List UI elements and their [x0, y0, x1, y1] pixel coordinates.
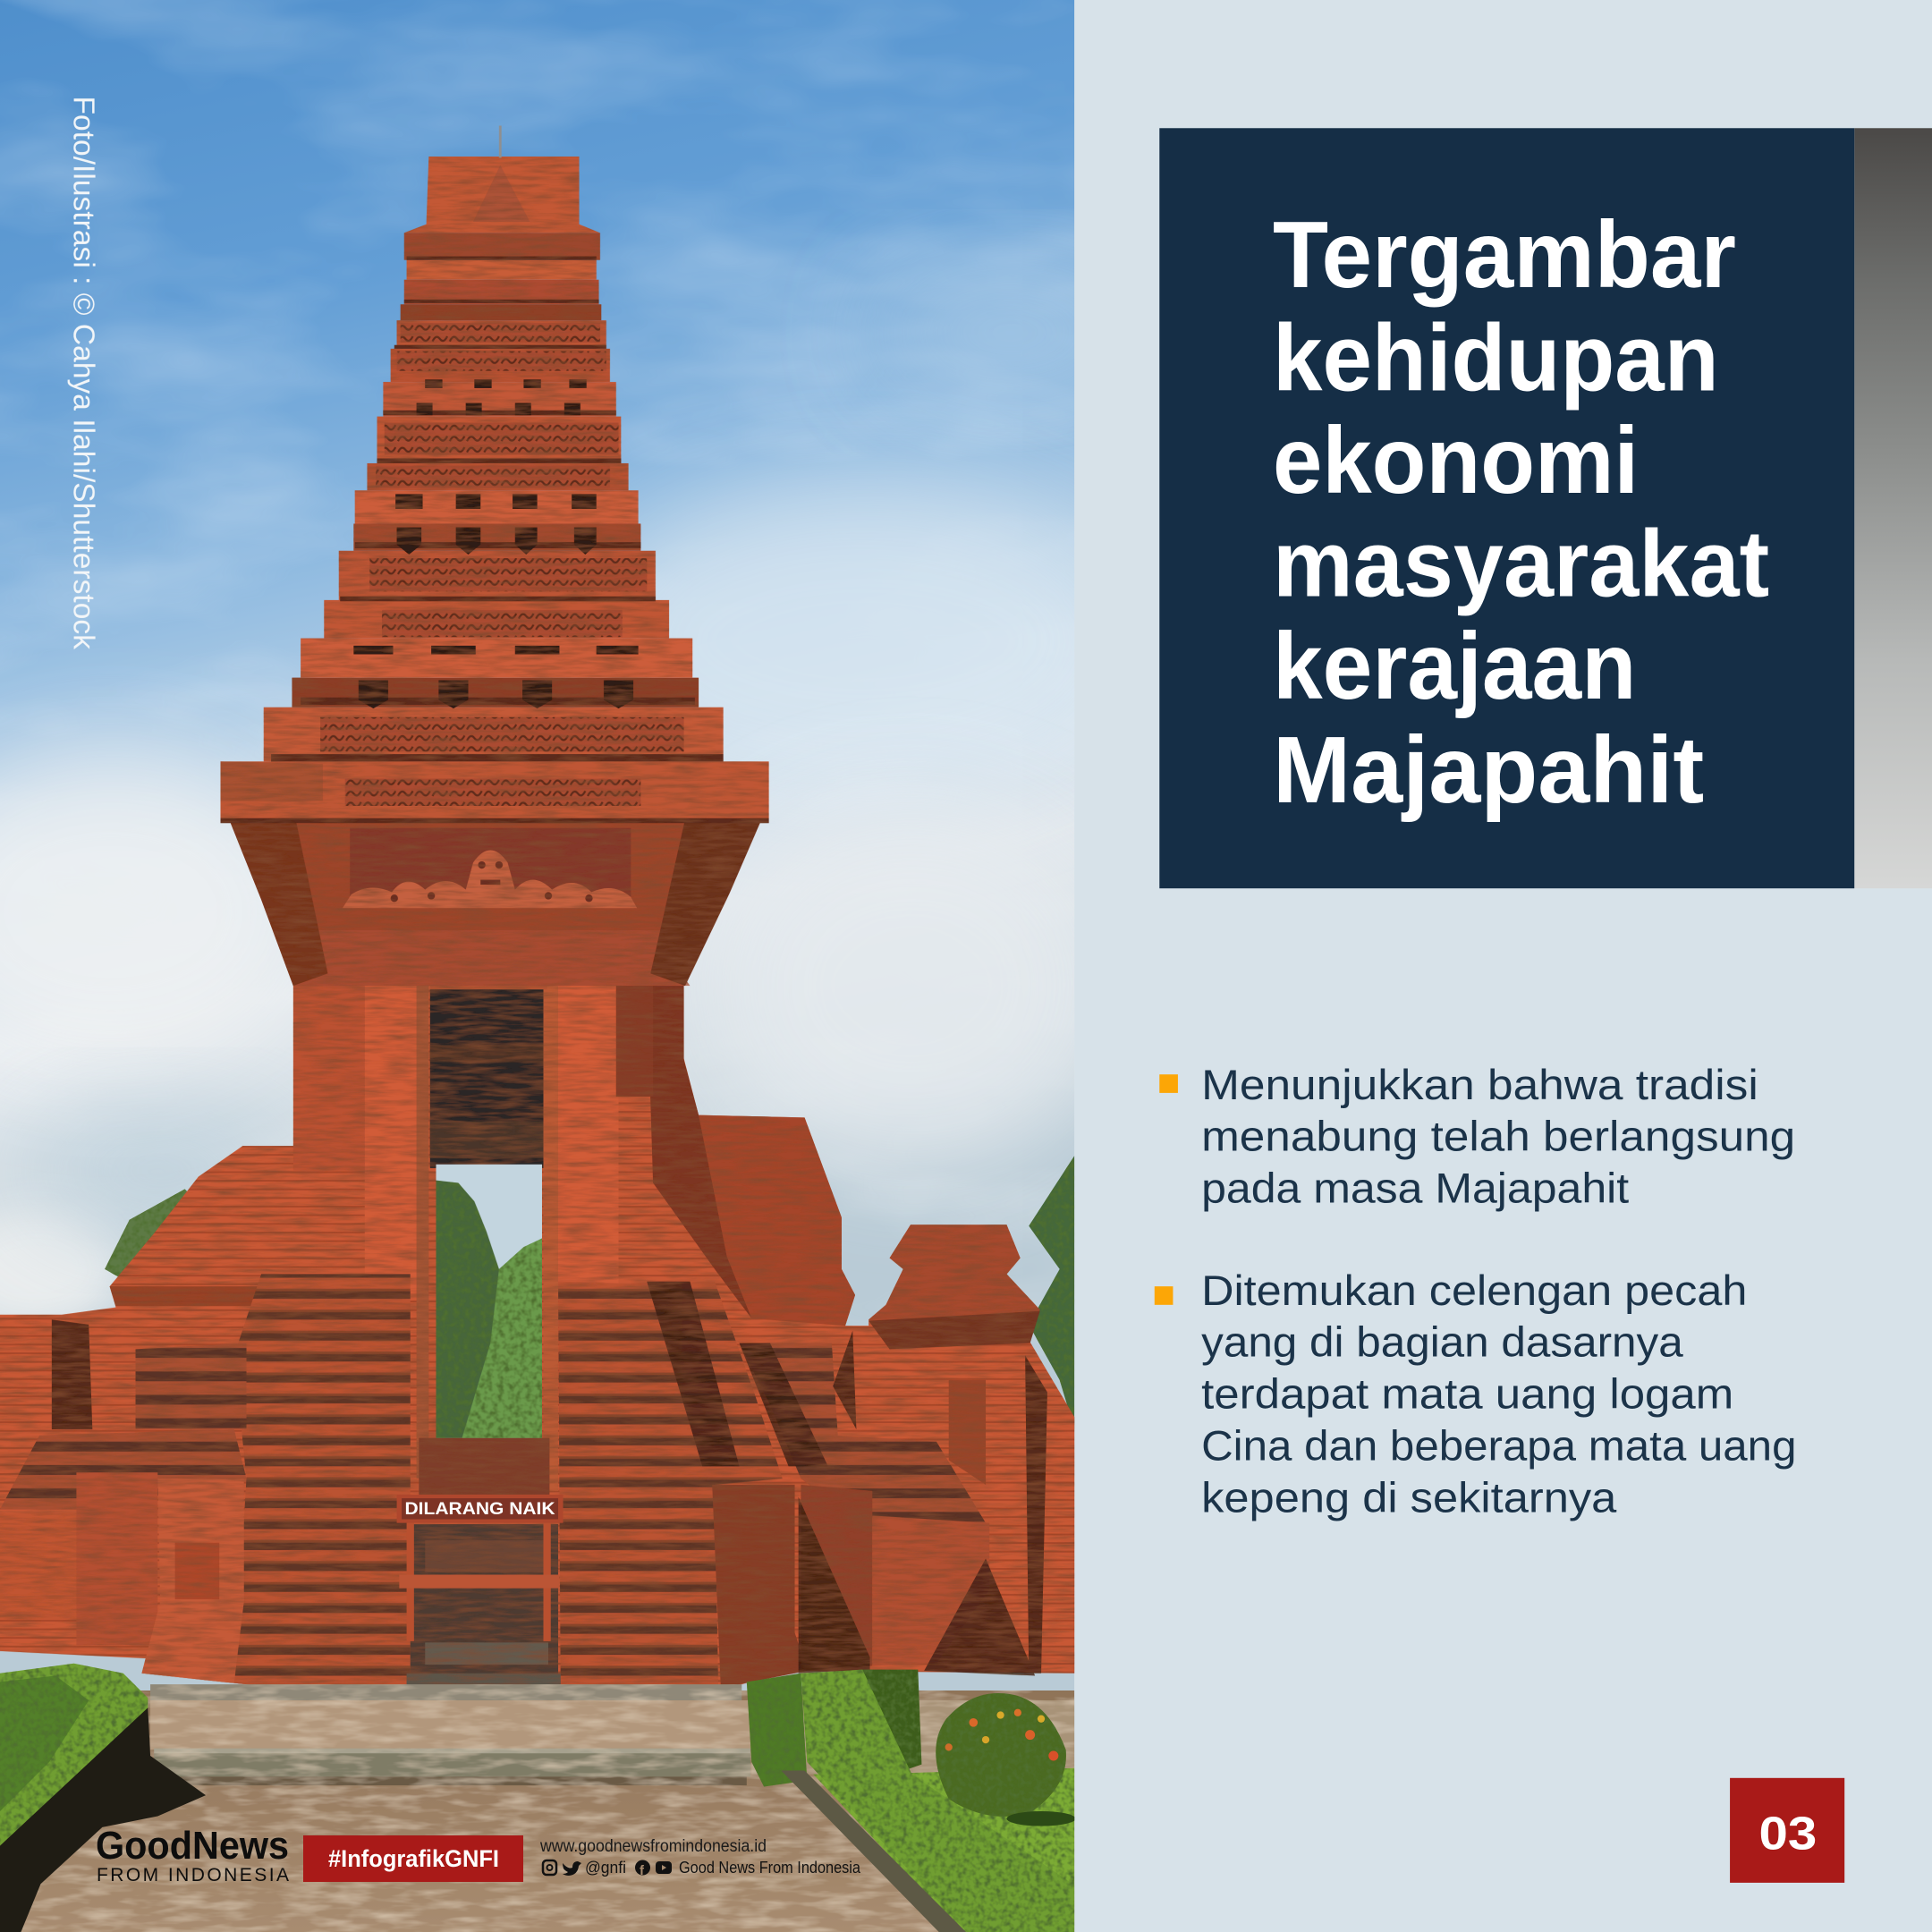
right pillar cap	[869, 1224, 1040, 1320]
icon: youtube	[656, 1861, 672, 1874]
bullet two text: Ditemukan celengan pecah	[1201, 1267, 1747, 1315]
hashtag badge	[303, 1835, 523, 1882]
central column bright bricks	[365, 986, 417, 1293]
front steps through the gate	[407, 1524, 561, 1690]
title text: Tergambar	[1273, 202, 1736, 308]
upper door dark cavity	[430, 989, 548, 1168]
social icons and handles	[543, 1859, 861, 1878]
icon: twitter	[563, 1861, 581, 1876]
bullet two text: terdapat mata uang logam	[1201, 1371, 1733, 1419]
finial rod	[499, 126, 502, 157]
flower bush	[936, 1693, 1066, 1817]
left hedge	[0, 1664, 148, 1846]
website url: www.goodnewsfromindonesia.id	[539, 1837, 767, 1856]
title text: masyarakat	[1273, 512, 1769, 617]
bullet two text: Cina dan beberapa mata uang	[1201, 1422, 1796, 1470]
sign: dilarang naik	[397, 1495, 564, 1641]
carved relief bands	[320, 323, 684, 806]
logo: GoodNews From Indonesia	[96, 1824, 289, 1885]
bullet one text	[1201, 1062, 1795, 1212]
dark tier shadow lines	[221, 257, 769, 823]
footer branding	[96, 1824, 861, 1885]
lower alcoves and plinths	[0, 1472, 989, 1688]
grey lintel	[404, 950, 579, 973]
photo credit rotated text: Foto/Ilustrasi : © Cahya Ilahi/Shutterstock	[67, 96, 100, 649]
title panel	[1159, 128, 1854, 888]
bullet two text: yang di bagian dasarnya	[1201, 1319, 1683, 1367]
photo: Bajang Ratu brick temple gate	[0, 0, 1146, 1932]
background trees left and right	[105, 1156, 1074, 1429]
title text: Majapahit	[1273, 717, 1704, 823]
bullet one text: pada masa Majapahit	[1201, 1165, 1629, 1212]
icon: instagram	[543, 1860, 556, 1875]
logo: GoodNews From Indonesia: GoodNews	[96, 1824, 289, 1868]
bullet two text	[1201, 1267, 1796, 1521]
title text	[1273, 202, 1769, 823]
temple gate body	[0, 157, 1074, 1698]
ground and garden	[0, 1664, 1076, 1932]
icon: facebook: f	[640, 1863, 645, 1878]
bush shadow	[1006, 1811, 1076, 1826]
grey gradient strip behind title	[1854, 128, 1932, 888]
door frame pipes	[417, 973, 558, 1491]
left stair flights	[0, 1274, 411, 1696]
ground surfaces	[0, 1684, 1074, 1932]
panel: right background	[1074, 0, 1932, 1932]
bullet point two	[1155, 1267, 1796, 1521]
photo sky	[0, 0, 1075, 1690]
door opening with sky and trees	[436, 1165, 542, 1438]
bullet one text: menabung telah berlangsung	[1201, 1114, 1795, 1161]
right stair flights	[558, 1282, 986, 1696]
bullet point one	[1159, 1062, 1795, 1212]
hashtag badge: #InfografikGNFI	[328, 1845, 499, 1872]
right wing face	[699, 1115, 855, 1326]
page number badge: 03	[1758, 1809, 1817, 1860]
dark niches	[353, 379, 639, 708]
logo: GoodNews From Indonesia: FROM INDONESIA	[97, 1865, 289, 1885]
bullet one text: Menunjukkan bahwa tradisi	[1201, 1062, 1758, 1109]
stone curb	[781, 1771, 966, 1932]
left wing shaded top ledge	[109, 1286, 258, 1306]
bullet two text: kepeng di sekitarnya	[1201, 1474, 1617, 1521]
sill under opening	[419, 1438, 549, 1495]
title text: ekonomi	[1273, 408, 1639, 513]
social icons and handles: @gnfi	[585, 1859, 626, 1877]
upper tower tiers	[221, 157, 769, 986]
hedge cast shadow	[0, 1707, 206, 1932]
title text: kerajaan	[1273, 614, 1636, 719]
right hedge and grass	[747, 1670, 1074, 1932]
kala head relief	[343, 828, 637, 908]
right pillar recess	[949, 1380, 986, 1485]
temple left wing and walls silhouette	[0, 961, 1074, 1698]
icon: facebook	[635, 1860, 650, 1878]
cast shadows	[52, 1282, 1047, 1675]
sign: dilarang naik: DILARANG NAIK	[405, 1500, 555, 1519]
social icons and handles: Good News From Indonesia	[679, 1859, 861, 1877]
title text: kehidupan	[1273, 306, 1719, 411]
page number badge	[1730, 1778, 1844, 1883]
